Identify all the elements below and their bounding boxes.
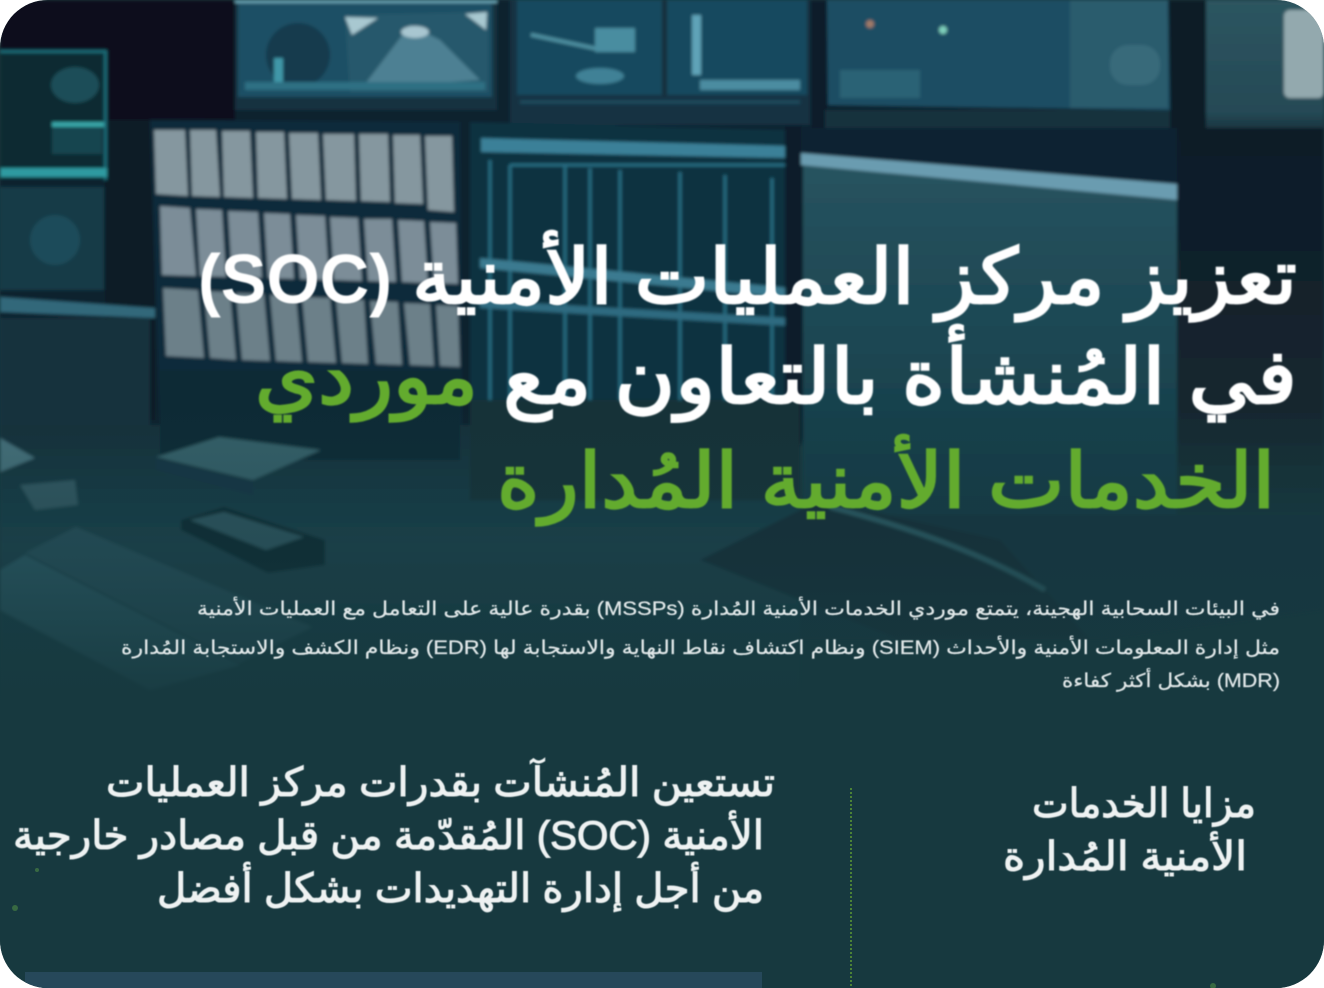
monitor: top 2	[510, 0, 810, 125]
benefits heading	[1003, 782, 1256, 880]
title line 2 highlight: موردي	[255, 335, 478, 422]
paragraph line 2: مثل إدارة المعلومات الأمنية والأحداث (SIEM) ونظام اكتشاف نقاط النهاية والاستجابة لها (EDR) ونظام الكشف والاستجابة المُدارة	[121, 636, 1280, 660]
heading line 2: الأمنية المُدارة	[1003, 831, 1247, 880]
title line 1: تعزيز مركز العمليات الأمنية	[412, 231, 1297, 322]
vertical divider	[850, 788, 852, 988]
bottom bar	[25, 972, 762, 988]
intro paragraph	[121, 597, 1280, 692]
title line 2: في المُنشأة بالتعاون مع	[503, 325, 1297, 422]
monitor: left screens	[0, 50, 155, 438]
description line 1: تستعين المُنشآت بقدرات مركز العمليات	[106, 758, 775, 806]
panel: large teal display	[798, 128, 1324, 476]
small green glints	[12, 868, 1216, 988]
description line 3: من أجل إدارة التهديدات بشكل أفضل	[157, 862, 764, 912]
description line 2: الأمنية (SOC) المُقدّمة من قبل مصادر خارجية	[13, 810, 764, 859]
monitor: top 3	[812, 0, 1175, 130]
title line 1 acronym: (SOC)	[198, 240, 392, 318]
fade overlay	[0, 463, 1046, 691]
panel: grey tile wall	[148, 118, 463, 370]
title	[198, 231, 1297, 526]
monitor: far right	[1170, 0, 1324, 140]
title line 3: الخدمات الأمنية المُدارة	[497, 435, 1275, 526]
desk with equipment	[0, 400, 1046, 662]
monitor: top 1	[235, 0, 497, 110]
paragraph line 3: (MDR) بشكل أكثر كفاءة	[1062, 668, 1280, 692]
panel: dark data wall	[470, 122, 802, 445]
paragraph line 1: في البيئات السحابية الهجينة، يتمتع موردي الخدمات الأمنية المُدارة (MSSPs) بقدرة عالية على التعامل مع العمليات الأمنية	[197, 597, 1280, 620]
heading line 1: مزايا الخدمات	[1032, 782, 1256, 827]
description text	[13, 758, 775, 912]
